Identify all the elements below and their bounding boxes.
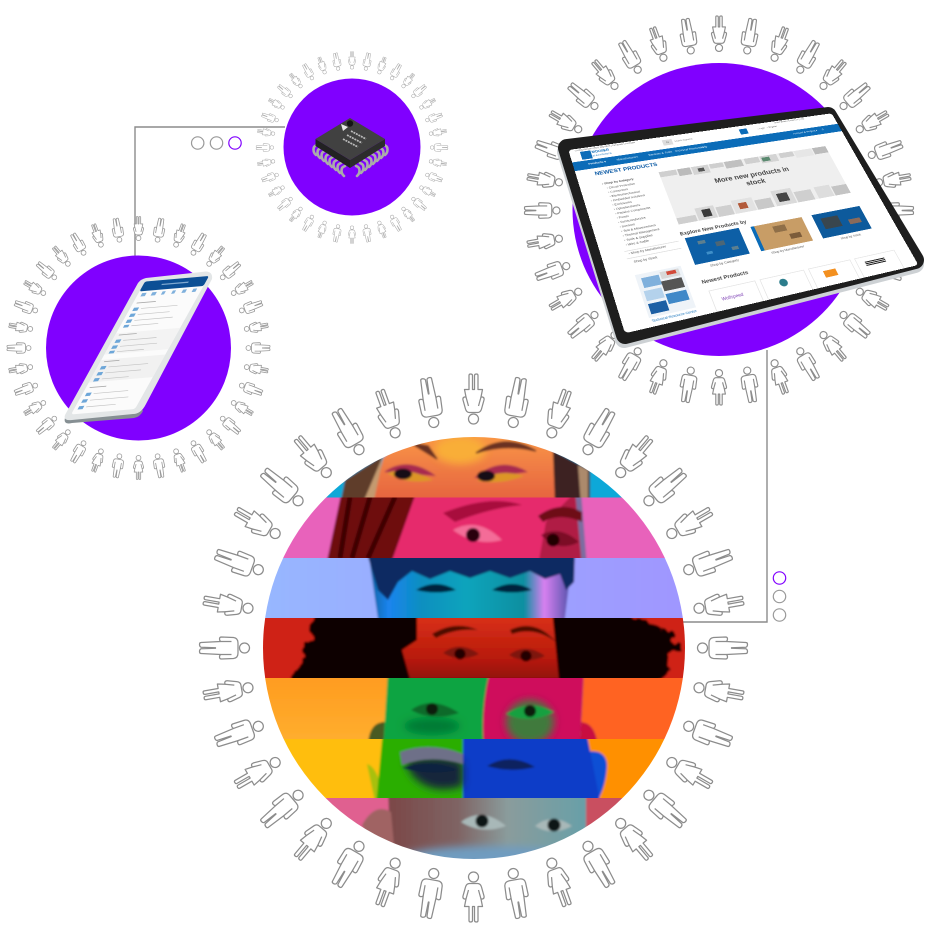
tablet screen: Products ▾ <box>588 160 606 165</box>
tablet screen: Wolfspeed <box>721 293 744 302</box>
face band 4: red <box>263 618 685 678</box>
face band 5: green and magenta <box>265 678 683 739</box>
face band 1: orange <box>326 437 622 498</box>
category menu: › Connectors <box>608 188 628 194</box>
search bar: Search Keyword <box>674 138 693 142</box>
site top bar: Contact Mouser (800) 346-6873 | Feedback | Purchase <box>574 141 636 152</box>
card: shop by manufacturer <box>750 217 813 251</box>
section heading: newest products: Newest Products <box>701 269 749 285</box>
category menu <box>602 177 682 264</box>
tablet screen: Technical Resources <box>674 145 704 152</box>
people ring: faces <box>200 374 748 922</box>
category menu: › Optoelectronics <box>613 203 641 211</box>
tablet body <box>566 116 915 339</box>
category menu: › Sensors <box>619 223 635 228</box>
face band 7: grey teal <box>326 798 622 859</box>
brand card: black logo <box>854 250 909 285</box>
phone mockup <box>65 272 212 423</box>
category menu: › Thermal Management <box>622 228 660 237</box>
card: shop by stock <box>811 206 872 238</box>
people ring: tablet <box>524 16 914 405</box>
category menu: › Test & Measurement <box>621 223 656 233</box>
category menu: › Circuit Protection <box>606 182 635 190</box>
brand card: globe <box>759 270 817 308</box>
tablet screen: Shop by Manufacturer <box>771 245 805 255</box>
brand card: wolfspeed <box>708 280 767 321</box>
category menu: › Tools & Supplies <box>624 233 653 242</box>
search bar: All <box>666 141 669 144</box>
logo <box>580 148 612 160</box>
category menu: Shop by Stock <box>633 256 658 264</box>
connector: chip to phone <box>135 127 285 256</box>
people ring: phone <box>7 216 270 480</box>
category menu: › Electromechanical <box>609 190 640 198</box>
tablet screen: Help <box>700 145 708 148</box>
card: shop by category <box>685 228 750 265</box>
banner <box>659 146 851 224</box>
face band 3: teal <box>265 558 683 618</box>
tablet screen: Manufacturers <box>616 155 638 161</box>
logo: ELECTRONICS <box>592 152 612 157</box>
category menu: › Semiconductors <box>618 216 646 224</box>
category menu: › Shop by Category <box>602 177 634 185</box>
faces disc <box>263 437 685 859</box>
category menu: › Power <box>616 214 629 220</box>
step dots: tablet to faces <box>773 572 786 621</box>
site top bar: ○ Login ○ Register <box>757 125 777 130</box>
tablet screen: Technical Resource Center <box>651 309 697 323</box>
purple circle: phone <box>46 256 231 440</box>
icon: microchip <box>314 118 388 176</box>
promo tile <box>635 266 696 318</box>
tablet screen: Shop by Stock <box>840 233 862 241</box>
category menu: › Wire & Cable <box>625 239 650 247</box>
purple circle: chip <box>284 78 420 216</box>
site top bar: United States | Contact Us | Help <box>774 118 805 124</box>
logo: MOUSER <box>591 148 610 154</box>
category menu: › Enclosures <box>612 200 632 207</box>
tablet screen <box>568 113 918 333</box>
people ring: chip <box>256 52 448 243</box>
tablet screen: Services & Tools <box>648 150 672 156</box>
connector: tablet to faces disc <box>683 350 767 622</box>
tablet screen: Shop by Category <box>710 259 740 268</box>
page heading: NEWEST PRODUCTS <box>594 161 658 177</box>
category menu: › Shop by Manufacturer <box>628 245 667 255</box>
face band 6: green and blue <box>284 739 664 798</box>
brand card: orange logo <box>808 259 864 297</box>
category menu: › Passive Components <box>615 206 651 215</box>
face band 2: magenta <box>283 498 665 558</box>
tablet screen: 0 <box>821 128 824 131</box>
banner: More new products in stock <box>713 166 790 187</box>
tablet screen: Account & Project ▾ <box>792 129 818 135</box>
section heading: explore: Explore New Products by <box>679 219 747 237</box>
site top bar <box>574 118 805 160</box>
category menu: › Embedded Solutions <box>610 194 645 202</box>
navigation bar <box>572 124 842 171</box>
search bar <box>662 128 749 146</box>
purple circle: tablet <box>572 63 866 356</box>
step dots: chip to phone <box>192 137 241 149</box>
